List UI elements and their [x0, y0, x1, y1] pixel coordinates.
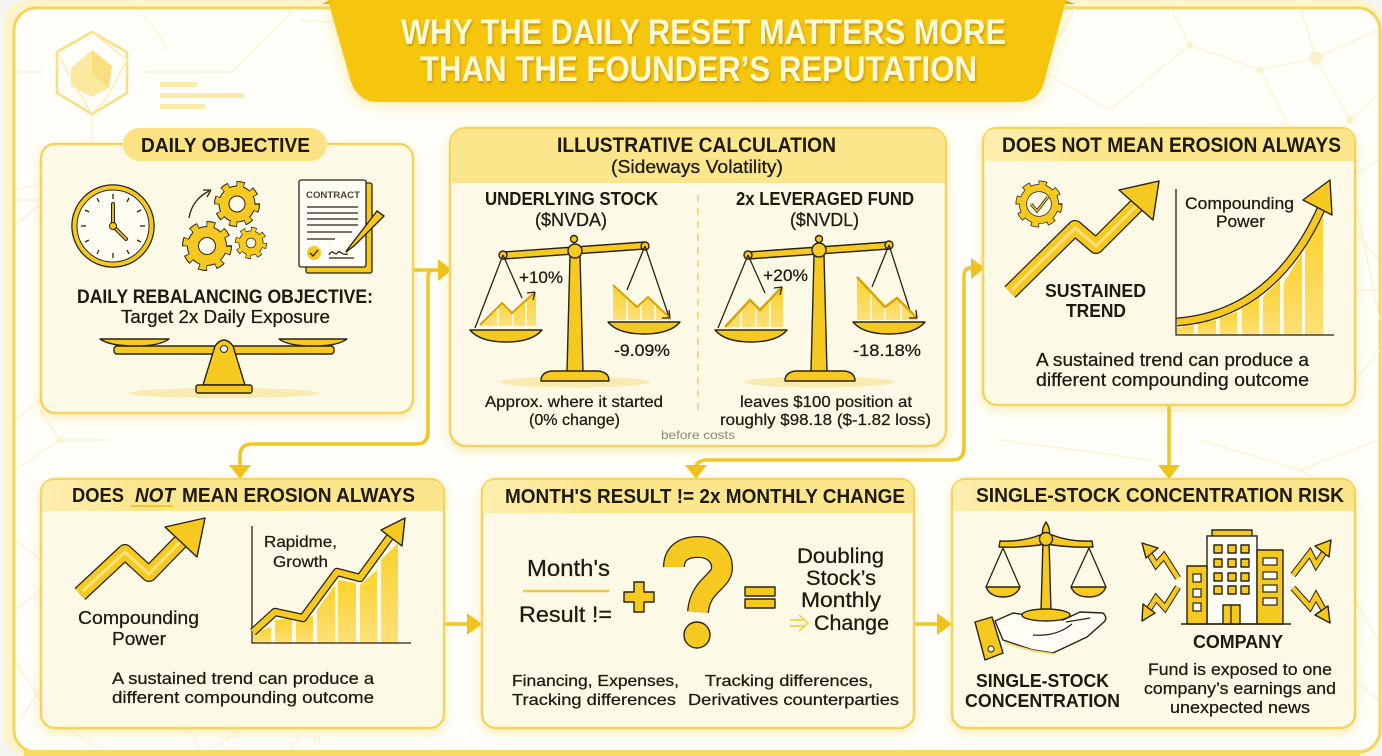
text: financing notes — [512, 673, 899, 709]
column: underlying stock: UNDERLYING STOCK — [485, 189, 658, 209]
icon: news bolts — [1142, 540, 1331, 623]
chart: compounding power: Compounding — [1185, 194, 1294, 213]
heading pill: daily objective: DAILY OBJECTIVE — [141, 135, 310, 157]
scale: leveraged fund — [715, 236, 925, 388]
title text: WHY THE DAILY RESET MATTERS MORE — [401, 13, 1006, 52]
chart: rapid growth: Growth — [273, 554, 328, 571]
arrow: erosion panel to concentration panel — [1158, 405, 1180, 479]
heading pill: daily objective — [123, 128, 327, 161]
panel: month's result — [482, 479, 914, 728]
text: doubling stock's monthly change: Change — [814, 612, 889, 635]
panel: does not mean erosion always (lower left) — [41, 479, 444, 728]
text: company description: company’s earnings and — [1144, 680, 1336, 698]
text: company description: unexpected news — [1170, 699, 1310, 717]
column: leveraged fund: leaves $100 position at — [740, 394, 913, 411]
header band: DOES NOT MEAN EROSION ALWAYS — [1002, 134, 1341, 157]
text: compounding description: different compounding outcome — [112, 688, 374, 707]
header band: MONTH'S RESULT != 2x MONTHLY CHANGE — [505, 485, 905, 508]
text: compounding description — [112, 669, 375, 707]
icon: compounding arrow — [80, 518, 205, 594]
panel: daily objective — [41, 128, 413, 413]
text: daily rebalancing objective: Target 2x Daily Exposure — [121, 307, 330, 327]
text: financing notes: Financing, Expenses, — [512, 673, 679, 690]
text: compounding description: A sustained trend can produce a — [112, 669, 375, 688]
logo text bars — [160, 82, 244, 109]
chart: compounding power: Power — [1216, 212, 1265, 231]
label: sustained trend: SUSTAINED — [1045, 281, 1146, 301]
header band: calculation — [451, 129, 945, 183]
arrow: calculation to right panel and down to month panel — [685, 258, 985, 479]
column: leveraged fund: +20% — [763, 266, 808, 285]
column: leveraged fund: -18.18% — [853, 341, 921, 360]
text: doubling stock's monthly change: Doubling — [797, 545, 884, 568]
header band — [953, 480, 1354, 511]
column: underlying stock: +10% — [519, 268, 563, 287]
arrow: daily objective to calculation and down to lower left — [229, 259, 452, 479]
title text: THAN THE FOUNDER’S REPUTATION — [420, 50, 977, 89]
header band: DOES — [72, 484, 124, 507]
header band: calculation: (Sideways Volatility) — [611, 157, 783, 177]
equation: month's result fraction: Result != — [519, 602, 612, 627]
text: financing notes: Tracking differences, — [705, 673, 873, 690]
header band: MEAN EROSION ALWAYS — [182, 484, 415, 507]
icon: balanced seesaw — [100, 339, 347, 398]
text: financing notes: Derivatives counterparties — [688, 692, 899, 709]
panel: does not mean erosion always (top right) — [983, 128, 1355, 405]
column: leveraged fund — [715, 189, 931, 429]
icon: clock — [72, 185, 154, 267]
icon: company building — [1181, 530, 1291, 624]
column: underlying stock: Approx. where it started — [485, 394, 663, 411]
text: financing notes: Tracking differences — [512, 692, 676, 709]
label: sustained trend: TREND — [1066, 301, 1126, 321]
label: compounding power: Power — [112, 629, 166, 649]
header band — [984, 129, 1354, 161]
divider — [697, 195, 699, 412]
header band — [483, 480, 913, 513]
icon: contract and pen: CONTRACT — [306, 190, 361, 200]
arrow: month panel to concentration panel — [914, 613, 952, 635]
text: daily rebalancing objective: DAILY REBALANCING OBJECTIVE: — [77, 286, 373, 308]
icon: equals sign — [745, 587, 775, 608]
label: single-stock concentration: SINGLE-STOCK — [976, 671, 1109, 691]
label: single-stock concentration — [965, 671, 1120, 711]
column: underlying stock: -9.09% — [614, 341, 670, 360]
text: company description: Fund is exposed to one — [1148, 661, 1332, 679]
text: sustained trend description — [1036, 350, 1310, 390]
equation: month's result fraction — [519, 555, 612, 627]
header band — [42, 480, 443, 511]
text: sustained trend description: different compounding outcome — [1036, 370, 1309, 390]
icon: gears — [187, 186, 264, 266]
label: single-stock concentration: CONCENTRATION — [965, 691, 1120, 711]
arrow: lower left to month panel — [444, 613, 482, 635]
header band: calculation: ILLUSTRATIVE CALCULATION — [557, 134, 836, 157]
header band: NOT — [135, 484, 176, 507]
column: underlying stock: ($NVDA) — [535, 210, 607, 230]
column: leveraged fund: 2x LEVERAGED FUND — [736, 189, 914, 209]
column: underlying stock — [470, 189, 680, 429]
scale: underlying stock — [470, 236, 680, 388]
label: compounding power: Compounding — [78, 608, 199, 628]
icon: gear with check — [1019, 184, 1059, 224]
column: leveraged fund: roughly $98.18 ($-1.82 loss) — [720, 412, 931, 429]
chart: compounding power — [1176, 180, 1334, 335]
icon: question mark — [674, 547, 722, 648]
header band: SINGLE-STOCK CONCENTRATION RISK — [976, 484, 1344, 507]
icon: sustained trend arrow — [1010, 181, 1159, 292]
text: doubling stock's monthly change: Monthly — [801, 589, 882, 612]
chart: rapid growth: Rapidme, — [264, 534, 337, 551]
icon: scale on hand — [975, 522, 1106, 660]
logo: hexagon cube — [57, 32, 127, 114]
panel: single-stock concentration risk — [952, 479, 1355, 728]
column: underlying stock: (0% change) — [529, 412, 620, 429]
icon: plus sign — [624, 582, 654, 612]
panel: illustrative calculation — [450, 128, 946, 446]
text: doubling stock's monthly change — [790, 545, 889, 635]
text: company description: COMPANY — [1193, 632, 1283, 652]
label: sustained trend — [1045, 281, 1146, 321]
chart: rapid growth — [252, 518, 411, 643]
column: leveraged fund: ($NVDL) — [790, 210, 859, 230]
label: compounding power — [78, 608, 199, 649]
equation: month's result fraction: Month's — [527, 555, 610, 581]
title banner — [322, 0, 1075, 102]
text: doubling stock's monthly change: Stock’s — [806, 567, 876, 590]
text: sustained trend description: A sustained trend can produce a — [1036, 350, 1310, 370]
title text — [401, 13, 1006, 89]
text: company description — [1144, 632, 1336, 717]
icon: contract and pen — [299, 180, 384, 273]
note: before costs: before costs — [661, 428, 735, 442]
text: daily rebalancing objective — [77, 286, 373, 327]
